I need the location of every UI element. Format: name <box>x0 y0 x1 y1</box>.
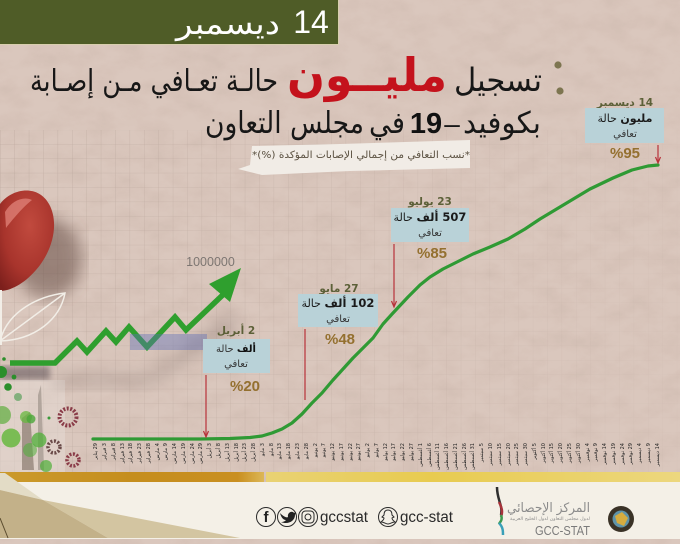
x axis date labels: 8 أبريل <box>215 443 222 458</box>
x axis date labels: 3 فبراير <box>102 443 108 461</box>
paper background <box>0 130 663 472</box>
callout: 2 April: ألف حالة <box>216 342 256 355</box>
x axis date labels: 7 يونيو <box>321 443 327 458</box>
date banner <box>0 0 339 45</box>
x axis date labels: 1 أغسطس <box>417 443 424 467</box>
callout: 14 December: %95 <box>610 145 640 162</box>
social handle: gccstat: gccstat <box>320 509 369 526</box>
callout: 14 December: 14 ديسمبر <box>596 97 653 109</box>
title: بكوفيد <box>463 106 541 141</box>
x axis date labels: 2 يونيو <box>313 443 319 458</box>
x axis date labels: 3 مايو <box>260 443 266 457</box>
x axis date labels: 14 نوفمبر <box>602 443 608 466</box>
x axis date labels: 9 مارس <box>163 443 169 460</box>
footer panel <box>0 482 680 539</box>
x axis date labels: 18 مايو <box>286 443 292 460</box>
gold bar <box>0 472 680 482</box>
x axis date labels: 16 أغسطس <box>443 443 450 470</box>
x axis date labels: 11 أغسطس <box>434 443 441 470</box>
callout: 2 April <box>203 323 270 437</box>
callout: 27 May <box>298 283 378 400</box>
x axis date labels: 13 مايو <box>277 443 283 460</box>
x axis date labels: 8 فبراير <box>111 443 117 461</box>
callout: 23 July: 507 ألف حالة <box>394 209 466 224</box>
arrow value label: 1000000 <box>186 255 235 269</box>
callout: 23 July: تعافي <box>418 228 442 239</box>
icon: instagram <box>298 508 318 526</box>
social handle: gcc-stat: gcc-stat <box>400 509 454 526</box>
blue overlay band <box>130 334 207 350</box>
x axis date labels: 14 مارس <box>172 443 178 464</box>
x axis date labels: 27 يونيو <box>356 443 362 461</box>
x axis date labels: 20 سبتمبر <box>506 443 512 466</box>
illustration: red fruit <box>0 190 82 298</box>
callout: 23 July: 23 يوليو <box>407 196 452 208</box>
subtitle strip <box>238 140 470 175</box>
date banner: 14 <box>293 4 329 40</box>
callout: 2 April: %20 <box>230 378 260 395</box>
x axis date labels: 12 يوليو <box>383 443 389 462</box>
GCC-STAT logo <box>497 487 590 538</box>
x axis date labels: 22 يوليو <box>400 443 406 462</box>
x axis date labels: 28 فبراير <box>146 443 152 464</box>
x axis date labels: 4 نوفمبر <box>585 443 591 462</box>
illustration: jar with viruses <box>0 357 65 472</box>
x axis date labels: 5 سبتمبر <box>479 443 485 463</box>
callout: 27 May: %48 <box>325 331 355 348</box>
x axis date labels: 28 أبريل <box>250 443 257 462</box>
GCC-STAT logo: المركز الإحصائي <box>507 501 590 516</box>
x axis date labels: 23 مايو <box>295 443 301 460</box>
x axis date labels: 8 مايو <box>269 443 275 457</box>
x axis date labels: 24 نوفمبر <box>620 443 626 466</box>
x axis date labels: 24 مارس <box>190 443 196 464</box>
x axis date labels: 22 يونيو <box>348 443 354 461</box>
x axis date labels: 10 سبتمبر <box>488 443 494 466</box>
x axis date labels: 9 ديسمبر <box>646 443 652 464</box>
icon: snapchat <box>378 508 398 526</box>
x axis date labels: 29 يناير <box>93 443 99 461</box>
subtitle strip: *نسب التعافي من إجمالي الإصابات المؤكدة (%)* <box>252 150 470 161</box>
callout: 27 May: 102 ألف حالة <box>302 295 374 310</box>
title: مجلس التعاون <box>205 106 364 141</box>
x axis date labels: 6 أغسطس <box>426 443 433 467</box>
GCC-STAT logo: GCC-STAT <box>535 523 590 538</box>
callout: 14 December <box>585 97 664 163</box>
callout: 14 December: مليون حالة <box>598 112 652 125</box>
title <box>30 48 542 141</box>
icon: facebook: f <box>264 509 270 526</box>
x axis date labels: 19 نوفمبر <box>611 443 617 466</box>
x axis date labels: 7 يوليو <box>374 443 380 458</box>
date banner: ديسمبر <box>174 7 280 42</box>
x axis date labels: 18 أبريل <box>233 443 240 462</box>
x axis date labels: 29 مارس <box>198 443 204 464</box>
footer corner triangles <box>0 473 240 538</box>
title: تسجيل <box>454 61 542 99</box>
x axis date labels: 17 يوليو <box>391 443 397 462</box>
callout: 2 April: 2 أبريل <box>217 323 255 337</box>
GCC emblem <box>608 506 634 532</box>
title: 19 <box>410 108 442 140</box>
x axis date labels: 13 أبريل <box>224 443 231 462</box>
callout: 27 May: 27 مايو <box>318 283 359 295</box>
title: في <box>369 106 405 141</box>
callout: 2 April: تعافي <box>224 359 248 370</box>
decorative bullets <box>554 61 564 95</box>
x axis date labels: 12 يونيو <box>330 443 336 461</box>
x axis date labels: 25 أكتوبر <box>566 443 573 464</box>
callout: 23 July: %85 <box>417 245 447 262</box>
x axis date labels: 30 أكتوبر <box>575 443 582 464</box>
x axis date labels: 15 أكتوبر <box>548 443 555 464</box>
x axis date labels: 29 نوفمبر <box>628 443 634 466</box>
x axis date labels: 13 فبراير <box>120 443 126 464</box>
title: – <box>444 108 460 139</box>
x axis date labels: 3 أبريل <box>206 443 213 458</box>
x axis date labels: 23 فبراير <box>137 443 143 464</box>
callout: 14 December: تعافي <box>613 129 637 140</box>
x axis date labels: 10 أكتوبر <box>540 443 547 464</box>
recovery curve <box>93 165 658 439</box>
x axis date labels: 26 أغسطس <box>461 443 468 470</box>
x axis date labels: 31 أغسطس <box>469 443 476 470</box>
x axis date labels: 4 ديسمبر <box>637 443 643 464</box>
x axis date labels: 28 مايو <box>304 443 310 460</box>
x axis date labels: 21 أغسطس <box>452 443 459 470</box>
x axis date labels: 4 مارس <box>155 443 161 460</box>
callout: 27 May: تعافي <box>326 314 350 325</box>
x axis date labels: 23 أبريل <box>241 443 248 462</box>
x axis date labels: 14 ديسمبر <box>655 443 661 467</box>
x axis date labels: 20 أكتوبر <box>557 443 564 464</box>
x axis date labels: 5 أكتوبر <box>531 443 538 461</box>
x axis date labels: 30 سبتمبر <box>523 443 529 466</box>
illustration: white leaf <box>0 290 65 345</box>
title: حالـة تعـافي مـن إصـابة <box>30 64 278 99</box>
x axis date labels: 18 فبراير <box>128 443 134 464</box>
x axis date labels: 17 يونيو <box>339 443 345 461</box>
x axis date labels: 25 سبتمبر <box>514 443 520 466</box>
GCC-STAT logo: لدول مجلس التعاون لدول الخليج العربية <box>510 517 590 522</box>
x axis date labels: 19 مارس <box>181 443 187 464</box>
x axis date labels: 9 نوفمبر <box>593 443 599 462</box>
x axis date labels: 15 سبتمبر <box>497 443 503 466</box>
illustration: red viruses <box>48 408 79 466</box>
rising arrow shadow <box>55 310 235 385</box>
x axis date labels: 2 يوليو <box>365 443 371 458</box>
rising green arrow <box>10 268 241 363</box>
x axis date labels: 27 يوليو <box>409 443 415 462</box>
callout: 23 July <box>391 196 469 307</box>
x axis date labels <box>93 443 661 470</box>
icon: twitter <box>278 508 296 526</box>
title: مليــون <box>287 48 447 102</box>
social icons <box>256 508 318 526</box>
